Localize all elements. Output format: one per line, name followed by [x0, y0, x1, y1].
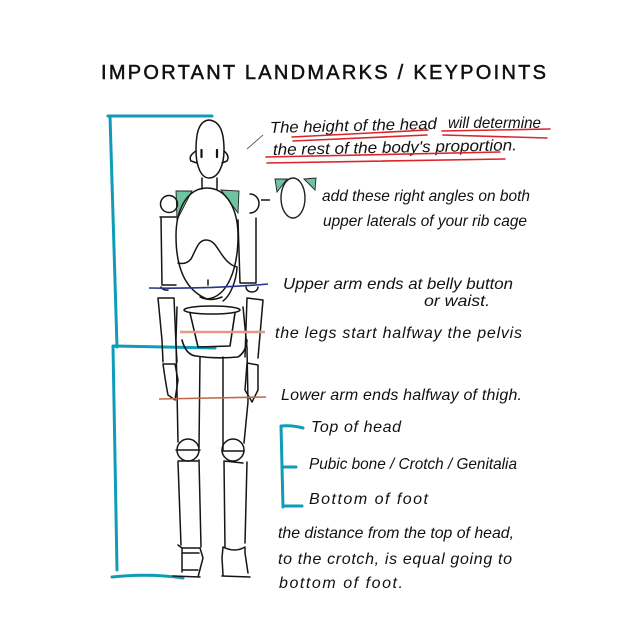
knees — [176, 439, 244, 461]
head and neck — [190, 120, 228, 189]
note: right angles: upper laterals of your rib cage — [323, 213, 527, 230]
pointer from head to note — [247, 135, 263, 149]
note: right angles — [322, 188, 530, 230]
note: lower arm: Lower arm ends halfway of thigh. — [281, 387, 522, 404]
note: head height: The height of the head — [270, 116, 438, 137]
note: distance: the distance from the top of head, — [278, 525, 514, 542]
note: legs start: the legs start halfway the pelvis — [275, 325, 522, 342]
thighs — [176, 307, 248, 450]
note: head height: the rest of the body's proportion. — [273, 137, 517, 159]
small teal bracket — [281, 426, 303, 507]
figure: human body keypoints — [158, 120, 263, 577]
note: upper arm: or waist. — [424, 293, 490, 310]
note: head height: will determine — [448, 115, 541, 132]
note: upper arm: Upper arm ends at belly button — [283, 276, 513, 293]
pelvis — [182, 306, 247, 358]
pelvis halfway line — [180, 331, 265, 333]
key point list: Top of head — [311, 419, 402, 436]
key point list — [309, 419, 517, 508]
note: distance: bottom of foot. — [279, 575, 403, 592]
shins and feet — [173, 460, 250, 577]
key point list: Pubic bone / Crotch / Genitalia — [309, 456, 517, 473]
icon: rib cage with right angles — [261, 178, 316, 218]
note: upper arm — [283, 276, 513, 310]
title: IMPORTANT LANDMARKS / KEYPOINTS — [101, 62, 546, 84]
rib cage — [176, 188, 238, 301]
key point list: Bottom of foot — [309, 491, 429, 508]
note: distance: to the crotch, is equal going to — [278, 551, 512, 568]
note: right angles: add these right angles on both — [322, 188, 530, 205]
teal height bracket — [108, 116, 215, 578]
navy belly button line — [149, 284, 268, 288]
upper arms and joints — [160, 194, 259, 292]
green shoulder triangles — [176, 190, 239, 220]
thigh halfway line — [159, 397, 266, 399]
note: distance — [278, 525, 514, 592]
note: head height — [266, 115, 550, 163]
forearms and hands — [158, 298, 263, 402]
